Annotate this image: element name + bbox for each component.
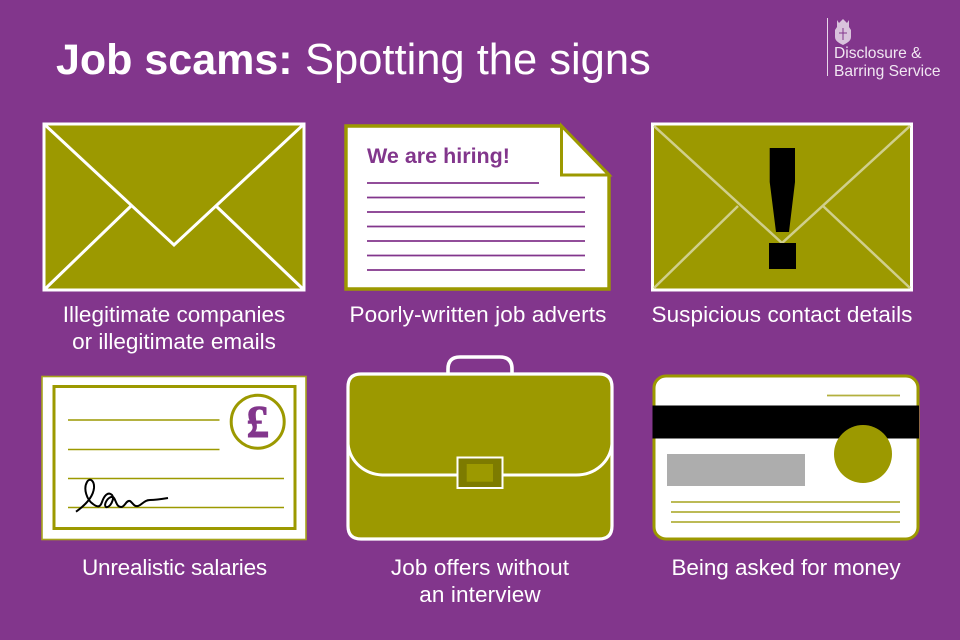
icon: bank card — [652, 376, 919, 539]
label: illegitimate companies: or illegitimate emails — [72, 329, 276, 354]
title: Spotting the signs — [305, 36, 651, 84]
signature — [76, 480, 168, 512]
exclamation mark — [769, 148, 796, 269]
title — [56, 36, 651, 84]
logo: Disclosure and Barring Service: Barring Service — [834, 63, 941, 80]
icon: cheque — [42, 376, 306, 540]
label: unrealistic salaries: Unrealistic salaries — [82, 555, 267, 580]
label: offers without interview: an interview — [419, 582, 541, 607]
pound sign: £ — [246, 397, 269, 447]
icon: suspicious envelope — [652, 124, 912, 290]
label: poorly-written adverts: Poorly-written job adverts — [350, 302, 606, 327]
advert heading: We are hiring! — [367, 144, 510, 168]
icon: job advert document — [346, 126, 609, 289]
label: offers without interview: Job offers without — [391, 555, 569, 580]
label: asked for money: Being asked for money — [671, 555, 901, 580]
icon: envelope — [44, 124, 304, 290]
label: illegitimate companies: Illegitimate companies — [63, 302, 285, 327]
icon: briefcase — [348, 357, 612, 539]
label: offers without interview — [391, 555, 569, 607]
label: suspicious contact details: Suspicious contact details — [652, 302, 912, 327]
clasp — [458, 458, 502, 488]
logo: Disclosure and Barring Service — [827, 18, 941, 80]
title: Job scams: — [56, 36, 293, 84]
logo: Disclosure and Barring Service: Disclosure & — [834, 45, 922, 62]
label: illegitimate companies — [63, 302, 285, 354]
